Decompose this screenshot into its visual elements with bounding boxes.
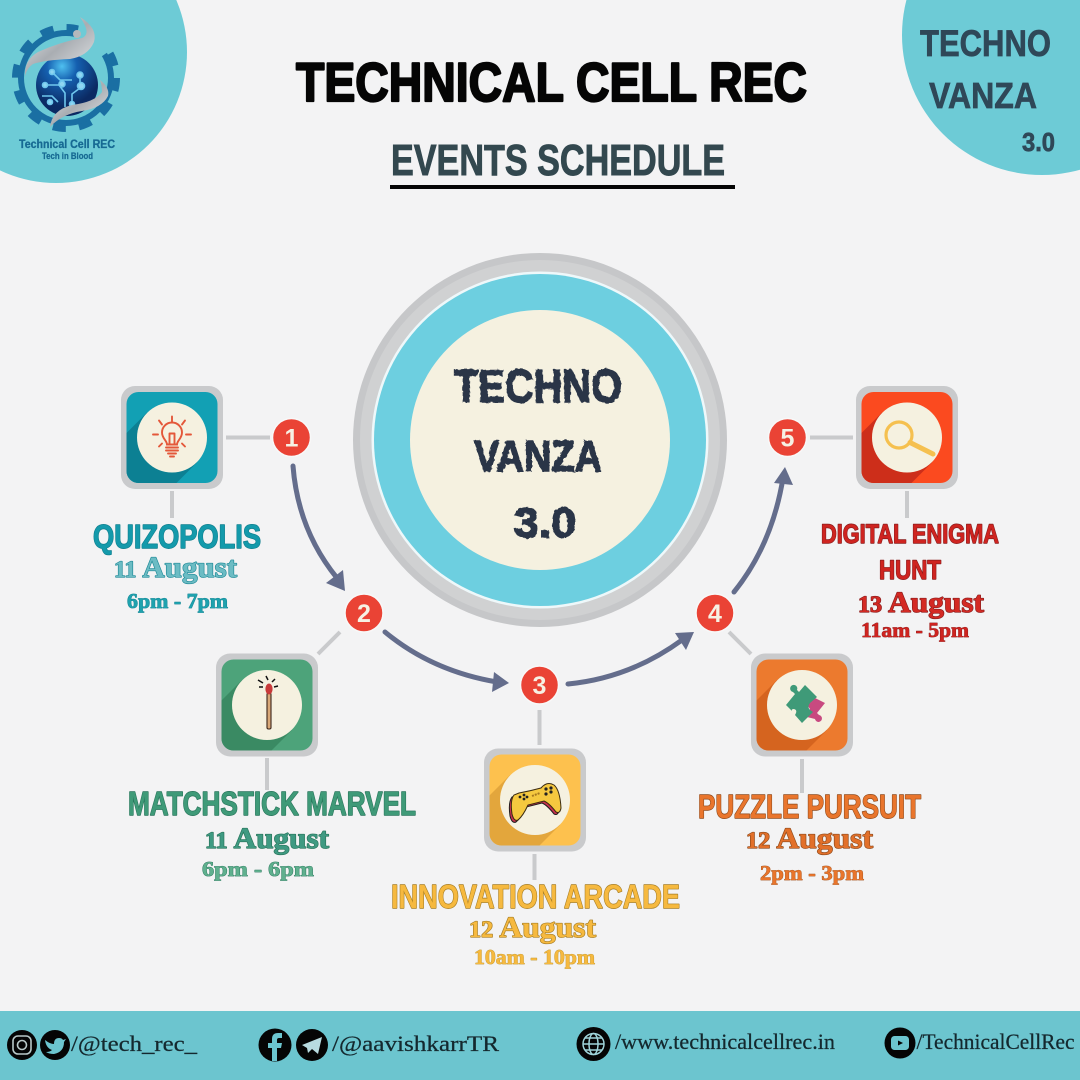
event: puzzle pursuit: PUZZLE PURSUIT: [698, 788, 921, 825]
step 3 node: 3: [533, 672, 546, 700]
icon: technical cell logo: [16, 17, 116, 162]
arrow: 1 to 2: [293, 466, 345, 591]
panel: logo corner: [0, 0, 187, 183]
event: digital enigma hunt: 11am - 5pm: [861, 618, 970, 642]
hub text: TECHNO: [454, 360, 622, 412]
panel: techno vanza corner badge: 3.0: [1022, 127, 1055, 157]
social group: youtube: [884, 1028, 1075, 1058]
logo name: Technical Cell REC: [19, 139, 115, 151]
central hub circle: [353, 253, 727, 627]
event: puzzle pursuit: 12 August: [746, 822, 873, 855]
arrow: 3 to 4: [568, 632, 694, 684]
icon tile: lightbulb: [121, 386, 223, 489]
social group: instagram and twitter: [7, 1030, 198, 1060]
event: matchstick marvel: 11 August: [205, 822, 329, 855]
arrow: 4 to 5: [734, 467, 793, 592]
icon tile: matchstick: [216, 654, 318, 756]
step 2 node: 2: [357, 600, 371, 628]
panel: techno vanza corner badge: VANZA: [929, 75, 1037, 116]
social group: youtube: /TechnicalCellRec: [916, 1029, 1075, 1054]
icon tile: puzzle piece: [751, 654, 853, 756]
event: puzzle pursuit: 2pm - 3pm: [760, 861, 865, 885]
step 5 node: [768, 418, 806, 456]
footer bar: [0, 1011, 1080, 1080]
social group: website: [576, 1027, 835, 1061]
social group: instagram and twitter: /@tech_rec_: [71, 1031, 198, 1056]
step 3 node: [520, 666, 558, 704]
panel: techno vanza corner badge: [902, 0, 1080, 175]
event: innovation arcade: [391, 878, 680, 969]
logo tagline: Tech in Blood: [42, 151, 93, 162]
panel: techno vanza corner badge: TECHNO: [920, 23, 1051, 64]
step 4 node: 4: [708, 600, 722, 628]
step 2 node: [345, 594, 383, 632]
event: quizopolis: QUIZOPOLIS: [93, 518, 261, 555]
title: TECHNICAL CELL REC: [296, 51, 807, 113]
step 4 node: [696, 594, 734, 632]
subtitle with underline: EVENTS SCHEDULE: [391, 136, 725, 185]
event: puzzle pursuit: [698, 788, 921, 885]
event: innovation arcade: 10am - 10pm: [474, 945, 596, 969]
hub text: [454, 360, 622, 546]
step 1 node: [272, 418, 310, 456]
event: quizopolis: [93, 518, 261, 613]
event: digital enigma hunt: DIGITAL ENIGMA: [821, 519, 999, 549]
event: matchstick marvel: MATCHSTICK MARVEL: [128, 785, 416, 822]
event: quizopolis: 6pm - 7pm: [127, 589, 229, 613]
event: quizopolis: 11 August: [114, 551, 237, 584]
icon tile: magnifying glass: [856, 386, 958, 489]
event: matchstick marvel: 6pm - 6pm: [202, 857, 315, 881]
event: innovation arcade: 12 August: [469, 911, 596, 944]
hub text: VANZA: [474, 432, 602, 481]
social group: website: /www.technicalcellrec.in: [615, 1029, 835, 1054]
connector lines: [172, 438, 907, 880]
event: innovation arcade: INNOVATION ARCADE: [391, 878, 680, 915]
step 1 node: 1: [285, 424, 299, 452]
social group: facebook and telegram: [258, 1028, 499, 1062]
event: digital enigma hunt: [821, 519, 999, 642]
step 5 node: 5: [781, 424, 795, 452]
hub text: 3.0: [514, 499, 576, 546]
social group: facebook and telegram: /@aavishkarrTR: [332, 1031, 499, 1056]
icon tile: game controller: [484, 748, 586, 852]
event: digital enigma hunt: HUNT: [879, 555, 941, 585]
event: digital enigma hunt: 13 August: [858, 586, 984, 619]
event: matchstick marvel: [128, 785, 416, 881]
arrow: 2 to 3: [385, 632, 509, 692]
